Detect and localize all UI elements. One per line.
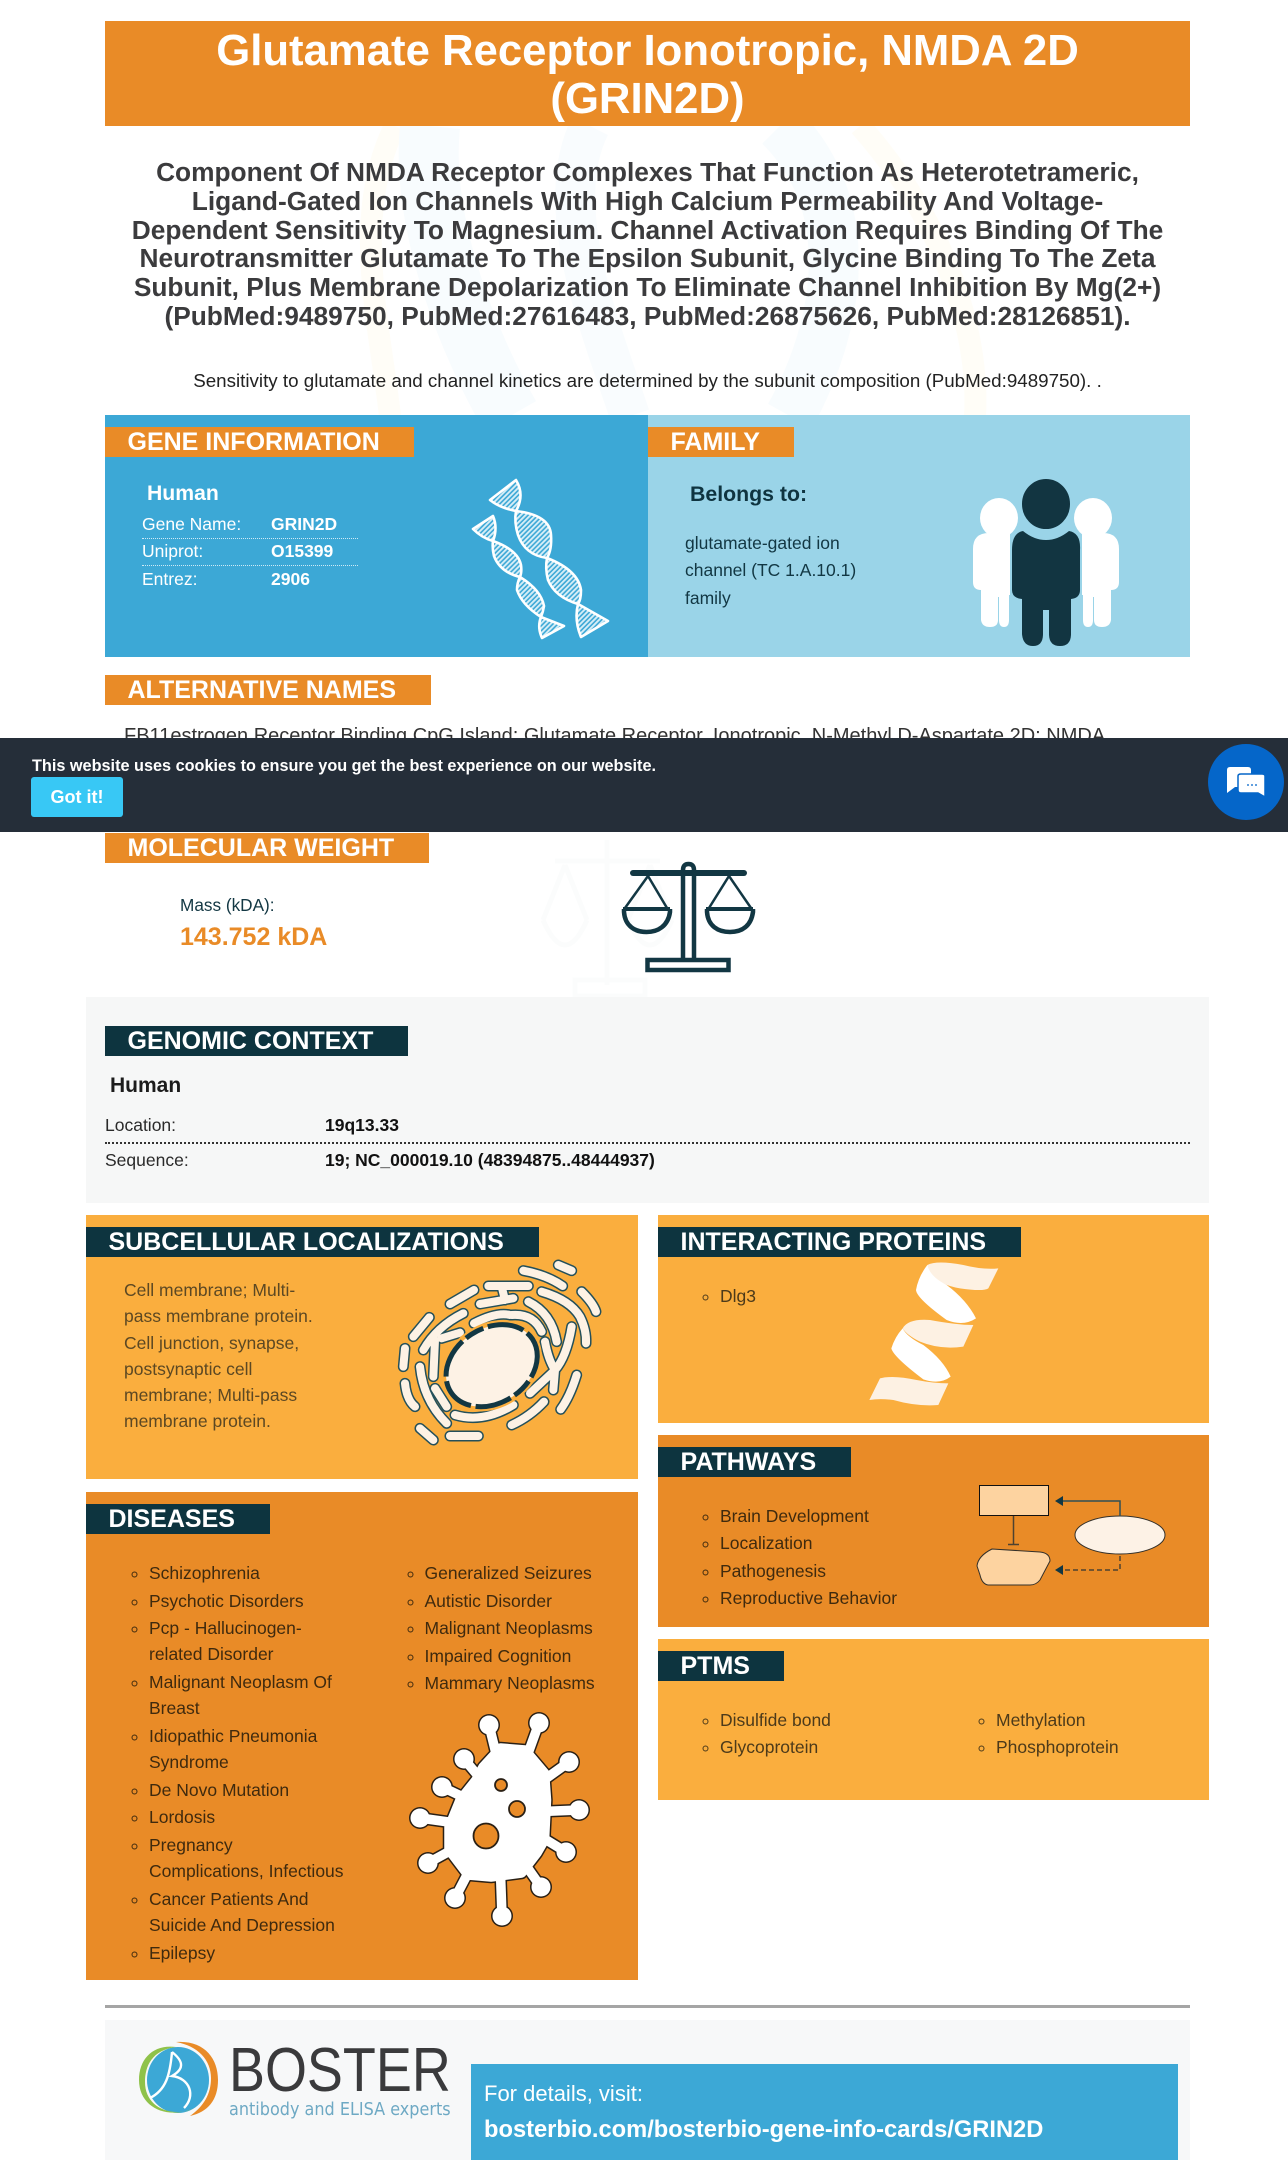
ptms list right: Phosphoprotein: [996, 1737, 1119, 1757]
panel: gene information: [105, 415, 648, 657]
ptms list right: Methylation: [996, 1710, 1086, 1730]
family heading: [648, 427, 794, 457]
diseases list left: Breast: [149, 1698, 200, 1718]
panel: family: [648, 415, 1190, 657]
location row: [105, 1113, 1190, 1144]
background watermark: [300, 126, 1000, 416]
footer divider: [105, 2005, 1190, 2008]
logo tagline: antibody and ELISA experts: [229, 2100, 451, 2120]
diseases list left: Suicide And Depression: [149, 1915, 335, 1935]
uniprot row: O15399: [271, 541, 333, 561]
subcellular text: pass membrane protein.: [124, 1306, 313, 1326]
visit callout: [471, 2064, 1178, 2160]
ptms list left: Disulfide bond: [720, 1710, 831, 1730]
family text: channel (TC 1.A.10.1): [685, 560, 856, 580]
pathways heading: [658, 1447, 851, 1477]
diseases list left: Idiopathic Pneumonia: [149, 1726, 317, 1746]
diseases list left: Psychotic Disorders: [149, 1590, 304, 1610]
description: Dependent Sensitivity To Magnesium. Channel Activation Requires Binding Of The: [132, 215, 1163, 245]
panel: footer: [105, 2020, 1190, 2160]
got it button: [31, 777, 123, 817]
panel: interacting proteins: [658, 1215, 1209, 1423]
family text: [685, 533, 856, 608]
panel: ptms: [658, 1639, 1209, 1800]
sequence row: 19; NC_000019.10 (48394875..48444937): [325, 1150, 655, 1170]
icon: virus: [409, 1712, 590, 1927]
pathways list: Reproductive Behavior: [720, 1588, 897, 1608]
panel: subcellular localizations: [86, 1215, 638, 1479]
alternative names heading: ALTERNATIVE NAMES: [128, 676, 396, 704]
diseases list left: Pcp - Hallucinogen-: [149, 1618, 302, 1638]
pathways list: Pathogenesis: [720, 1560, 826, 1580]
diseases list left: Cancer Patients And: [149, 1889, 309, 1909]
genomic context heading: GENOMIC CONTEXT: [128, 1027, 373, 1055]
pathways list: [702, 1506, 897, 1608]
pathways list: Brain Development: [720, 1506, 869, 1526]
ptms list left: [702, 1710, 831, 1757]
ptms list right: [978, 1710, 1119, 1757]
family heading: FAMILY: [670, 428, 760, 456]
diseases list left: Lordosis: [149, 1807, 215, 1827]
sequence row: [105, 1150, 655, 1170]
location row: Location:: [105, 1115, 176, 1135]
description: Subunit, Plus Membrane Depolarization To Eliminate Channel Inhibition By Mg(2+): [134, 272, 1161, 302]
diseases heading: [86, 1504, 270, 1534]
diseases list left: Complications, Infectious: [149, 1861, 344, 1881]
diseases heading: DISEASES: [108, 1505, 235, 1533]
visit label: For details, visit:: [484, 2081, 643, 2106]
mass value: 143.752 kDA: [180, 923, 327, 951]
entrez row: 2906: [271, 569, 310, 589]
panel: genomic context: [86, 997, 1209, 1203]
diseases list left: [132, 1563, 344, 1963]
description: Component Of NMDA Receptor Complexes That Function As Heterotetrameric,: [156, 157, 1139, 187]
got it button: Got it!: [50, 787, 103, 807]
diseases list right: Mammary Neoplasms: [424, 1673, 595, 1693]
species: Human: [147, 482, 219, 505]
icon: chat button: [1208, 744, 1284, 820]
diseases list left: Malignant Neoplasm Of: [149, 1672, 332, 1692]
mass label: Mass (kDA):: [180, 895, 275, 915]
diseases list right: Generalized Seizures: [424, 1563, 592, 1583]
subcellular text: Cell junction, synapse,: [124, 1333, 299, 1353]
subcellular text: membrane; Multi-pass: [124, 1385, 297, 1405]
ptms heading: PTMS: [680, 1652, 750, 1680]
panel: diseases: [86, 1492, 638, 1980]
gene name row: [142, 512, 358, 539]
subcellular text: Cell membrane; Multi-: [124, 1280, 295, 1300]
logo wordmark: BOSTER: [229, 2036, 451, 2105]
diseases list right: Malignant Neoplasms: [424, 1618, 593, 1638]
subunit note: Sensitivity to glutamate and channel kinetics are determined by the subunit composition (PubMed:9489750). .: [193, 370, 1102, 391]
icon: dna: [472, 478, 610, 640]
watermark scale: [535, 835, 685, 1000]
visit link: bosterbio.com/bosterbio-gene-info-cards/GRIN2D: [484, 2117, 1043, 2143]
subcellular text: postsynaptic cell: [124, 1359, 252, 1379]
ptms heading: [658, 1651, 784, 1681]
diseases list left: Syndrome: [149, 1752, 229, 1772]
molecular weight heading: MOLECULAR WEIGHT: [128, 834, 394, 862]
title: Glutamate Receptor Ionotropic, NMDA 2D: [216, 26, 1079, 75]
ptms list left: Glycoprotein: [720, 1737, 818, 1757]
location row: 19q13.33: [325, 1115, 399, 1135]
description: (PubMed:9489750, PubMed:27616483, PubMed:26875626, PubMed:28126851).: [164, 301, 1131, 331]
diseases list left: De Novo Mutation: [149, 1780, 289, 1800]
title: (GRIN2D): [550, 74, 745, 123]
icon: boster logo: [139, 2042, 218, 2116]
diseases list left: Schizophrenia: [149, 1563, 260, 1583]
family text: family: [685, 588, 731, 608]
cookie message: This website uses cookies to ensure you get the best experience on our website.: [32, 757, 656, 775]
description: Ligand-Gated Ion Channels With High Calcium Permeability And Voltage-: [192, 186, 1103, 216]
diseases list right: [408, 1563, 595, 1693]
subcellular text: membrane protein.: [124, 1411, 271, 1431]
subcellular heading: SUBCELLULAR LOCALIZATIONS: [108, 1228, 504, 1256]
gene name row: Gene Name:: [142, 514, 241, 534]
gene information heading: GENE INFORMATION: [128, 428, 380, 456]
description: Neurotransmitter Glutamate To The Epsilon Subunit, Glycine Binding To The Zeta: [140, 243, 1155, 273]
family text: glutamate-gated ion: [685, 533, 840, 553]
icon: cell: [398, 1260, 602, 1446]
diseases list right: Autistic Disorder: [424, 1590, 552, 1610]
uniprot row: [142, 539, 358, 566]
diseases list left: Epilepsy: [149, 1943, 215, 1963]
alternative names text: FB11estrogen Receptor Binding CpG Island; Glutamate Receptor, Ionotropic, N-Methyl D-Aspartate 2D; NMDA: [124, 725, 1105, 747]
interacting proteins heading: INTERACTING PROTEINS: [680, 1228, 986, 1256]
cookie banner: [0, 738, 1288, 832]
interacting list: Dlg3: [720, 1286, 756, 1306]
diseases list right: Impaired Cognition: [424, 1646, 571, 1666]
panel: pathways: [658, 1435, 1209, 1627]
sequence row: Sequence:: [105, 1150, 189, 1170]
diseases list left: Pregnancy: [149, 1835, 233, 1855]
diseases list left: related Disorder: [149, 1644, 274, 1664]
gene name row: GRIN2D: [271, 514, 337, 534]
entrez row: [142, 569, 310, 589]
title: [105, 21, 1190, 126]
pathways heading: PATHWAYS: [680, 1448, 816, 1476]
belongs to heading: Belongs to:: [690, 482, 807, 506]
entrez row: Entrez:: [142, 569, 197, 589]
icon: people: [973, 479, 1119, 646]
icon: protein helix: [869, 1262, 998, 1406]
species: Human: [110, 1074, 181, 1097]
description: [132, 157, 1163, 331]
pathways list: Localization: [720, 1533, 812, 1553]
subcellular text: [124, 1280, 313, 1431]
icon: balance scale: [622, 862, 756, 972]
icon: pathway diagram: [976, 1485, 1166, 1586]
uniprot row: Uniprot:: [142, 541, 203, 561]
